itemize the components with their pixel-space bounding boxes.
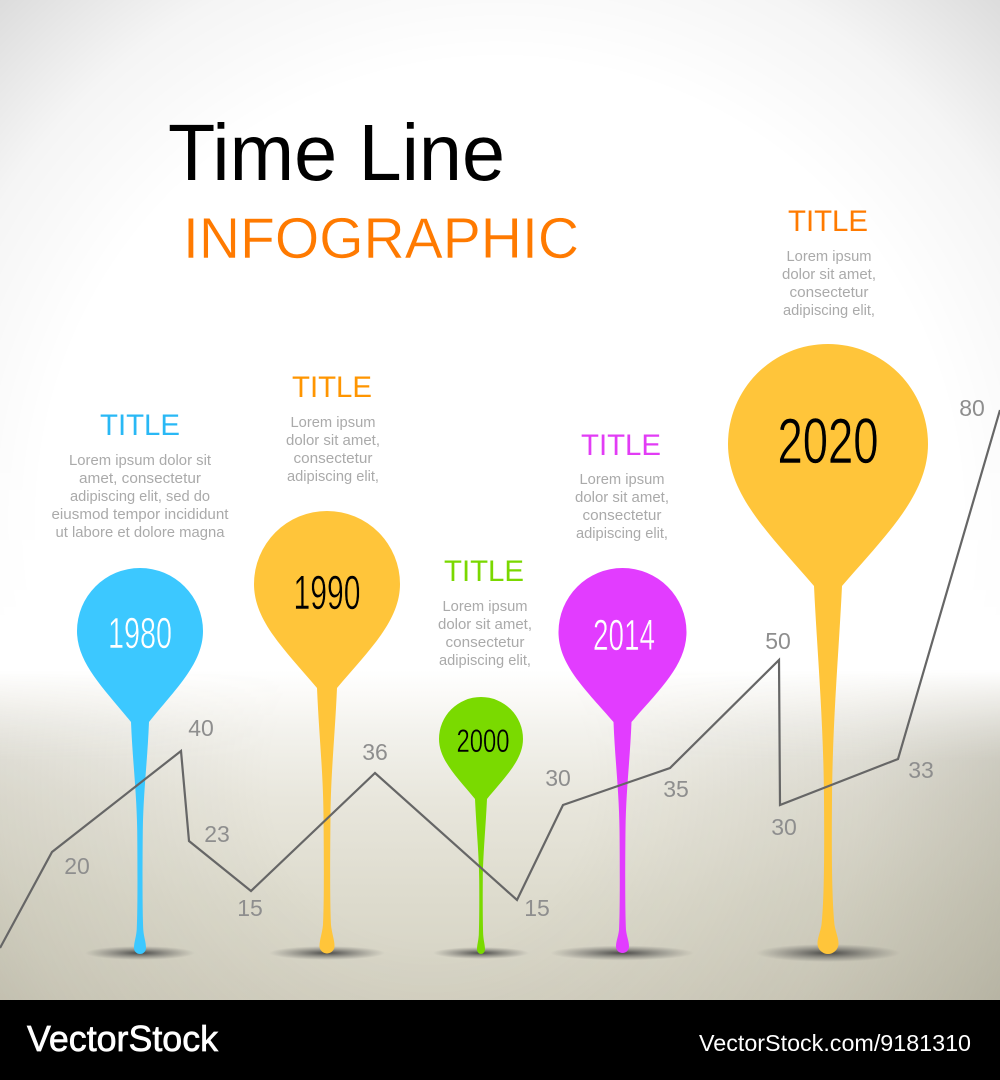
footer url: VectorStock.com/9181310 bbox=[699, 1030, 971, 1056]
text block: 2020: Lorem ipsum bbox=[786, 249, 872, 265]
text block: 2020 bbox=[782, 205, 876, 319]
text block: 2000: Lorem ipsum bbox=[442, 599, 528, 615]
text block: 2014: adipiscing elit, bbox=[576, 526, 668, 542]
text block: 2000: dolor sit amet, bbox=[438, 617, 532, 633]
footer bar bbox=[0, 1000, 1000, 1080]
text block: 2014 bbox=[575, 429, 669, 542]
heading: Time Line: Time Line bbox=[168, 108, 505, 197]
chart value labels: 40 bbox=[188, 715, 214, 741]
text block: 2014: Lorem ipsum bbox=[580, 472, 664, 488]
chart value labels: 50 bbox=[765, 628, 791, 654]
text block: 2000: consectetur bbox=[446, 635, 525, 651]
text block: 2020: TITLE bbox=[788, 205, 868, 238]
pin: 2000: 2000 bbox=[456, 723, 510, 759]
text block: 2014: consectetur bbox=[582, 508, 662, 524]
pin: 2014 bbox=[550, 568, 694, 960]
pin: 1980: 1980 bbox=[108, 609, 172, 658]
text block: 1990: TITLE bbox=[292, 371, 372, 404]
text block: 2020: consectetur bbox=[790, 285, 869, 301]
text block: 1980: TITLE bbox=[100, 409, 180, 442]
text block: 1980: ut labore et dolore magna bbox=[56, 525, 225, 541]
pin: 2020 bbox=[728, 344, 928, 962]
text block: 2014: dolor sit amet, bbox=[575, 490, 669, 506]
chart value labels: 30 bbox=[545, 765, 571, 791]
text block: 1980: amet, consectetur bbox=[79, 471, 201, 487]
text block: 1980: adipiscing elit, sed do bbox=[70, 489, 210, 505]
pin: 2000 bbox=[433, 697, 529, 959]
pin: 2014: 2014 bbox=[593, 611, 655, 660]
text block: 2020: adipiscing elit, bbox=[783, 303, 875, 319]
chart value labels bbox=[64, 395, 985, 921]
text block: 2000: TITLE bbox=[444, 555, 524, 588]
footer logo: VectorStock bbox=[27, 1018, 219, 1059]
chart value labels: 15 bbox=[237, 895, 263, 921]
pin: 2020: 2020 bbox=[778, 405, 878, 477]
chart value labels: 80 bbox=[959, 395, 985, 421]
pin: 1990 bbox=[254, 511, 400, 960]
text block: 1980: Lorem ipsum dolor sit bbox=[69, 453, 211, 469]
text block: 1980: eiusmod tempor incididunt bbox=[52, 507, 228, 523]
text block: 1990: dolor sit amet, bbox=[286, 433, 380, 449]
text block: 2014: TITLE bbox=[581, 429, 661, 462]
heading: Infographic: INFOGRAPHIC bbox=[183, 207, 579, 271]
text block: 1990: Lorem ipsum bbox=[290, 415, 376, 431]
chart value labels: 15 bbox=[524, 895, 550, 921]
pin: 1980 bbox=[77, 568, 203, 960]
chart value labels: 30 bbox=[771, 814, 797, 840]
chart value labels: 35 bbox=[663, 776, 689, 802]
text block: 1980 bbox=[52, 409, 228, 541]
text block: 2000 bbox=[438, 555, 532, 669]
chart value labels: 33 bbox=[908, 757, 934, 783]
text block: 2020: dolor sit amet, bbox=[782, 267, 876, 283]
title bbox=[168, 108, 579, 271]
chart value labels: 20 bbox=[64, 853, 90, 879]
text block: 1990: adipiscing elit, bbox=[287, 469, 379, 485]
text block: 1990: consectetur bbox=[294, 451, 373, 467]
chart value labels: 36 bbox=[362, 739, 388, 765]
text block: 1990 bbox=[286, 371, 380, 485]
pin: 1990: 1990 bbox=[294, 567, 360, 620]
chart value labels: 23 bbox=[204, 821, 230, 847]
text block: 2000: adipiscing elit, bbox=[439, 653, 531, 669]
line chart bbox=[0, 395, 1000, 948]
